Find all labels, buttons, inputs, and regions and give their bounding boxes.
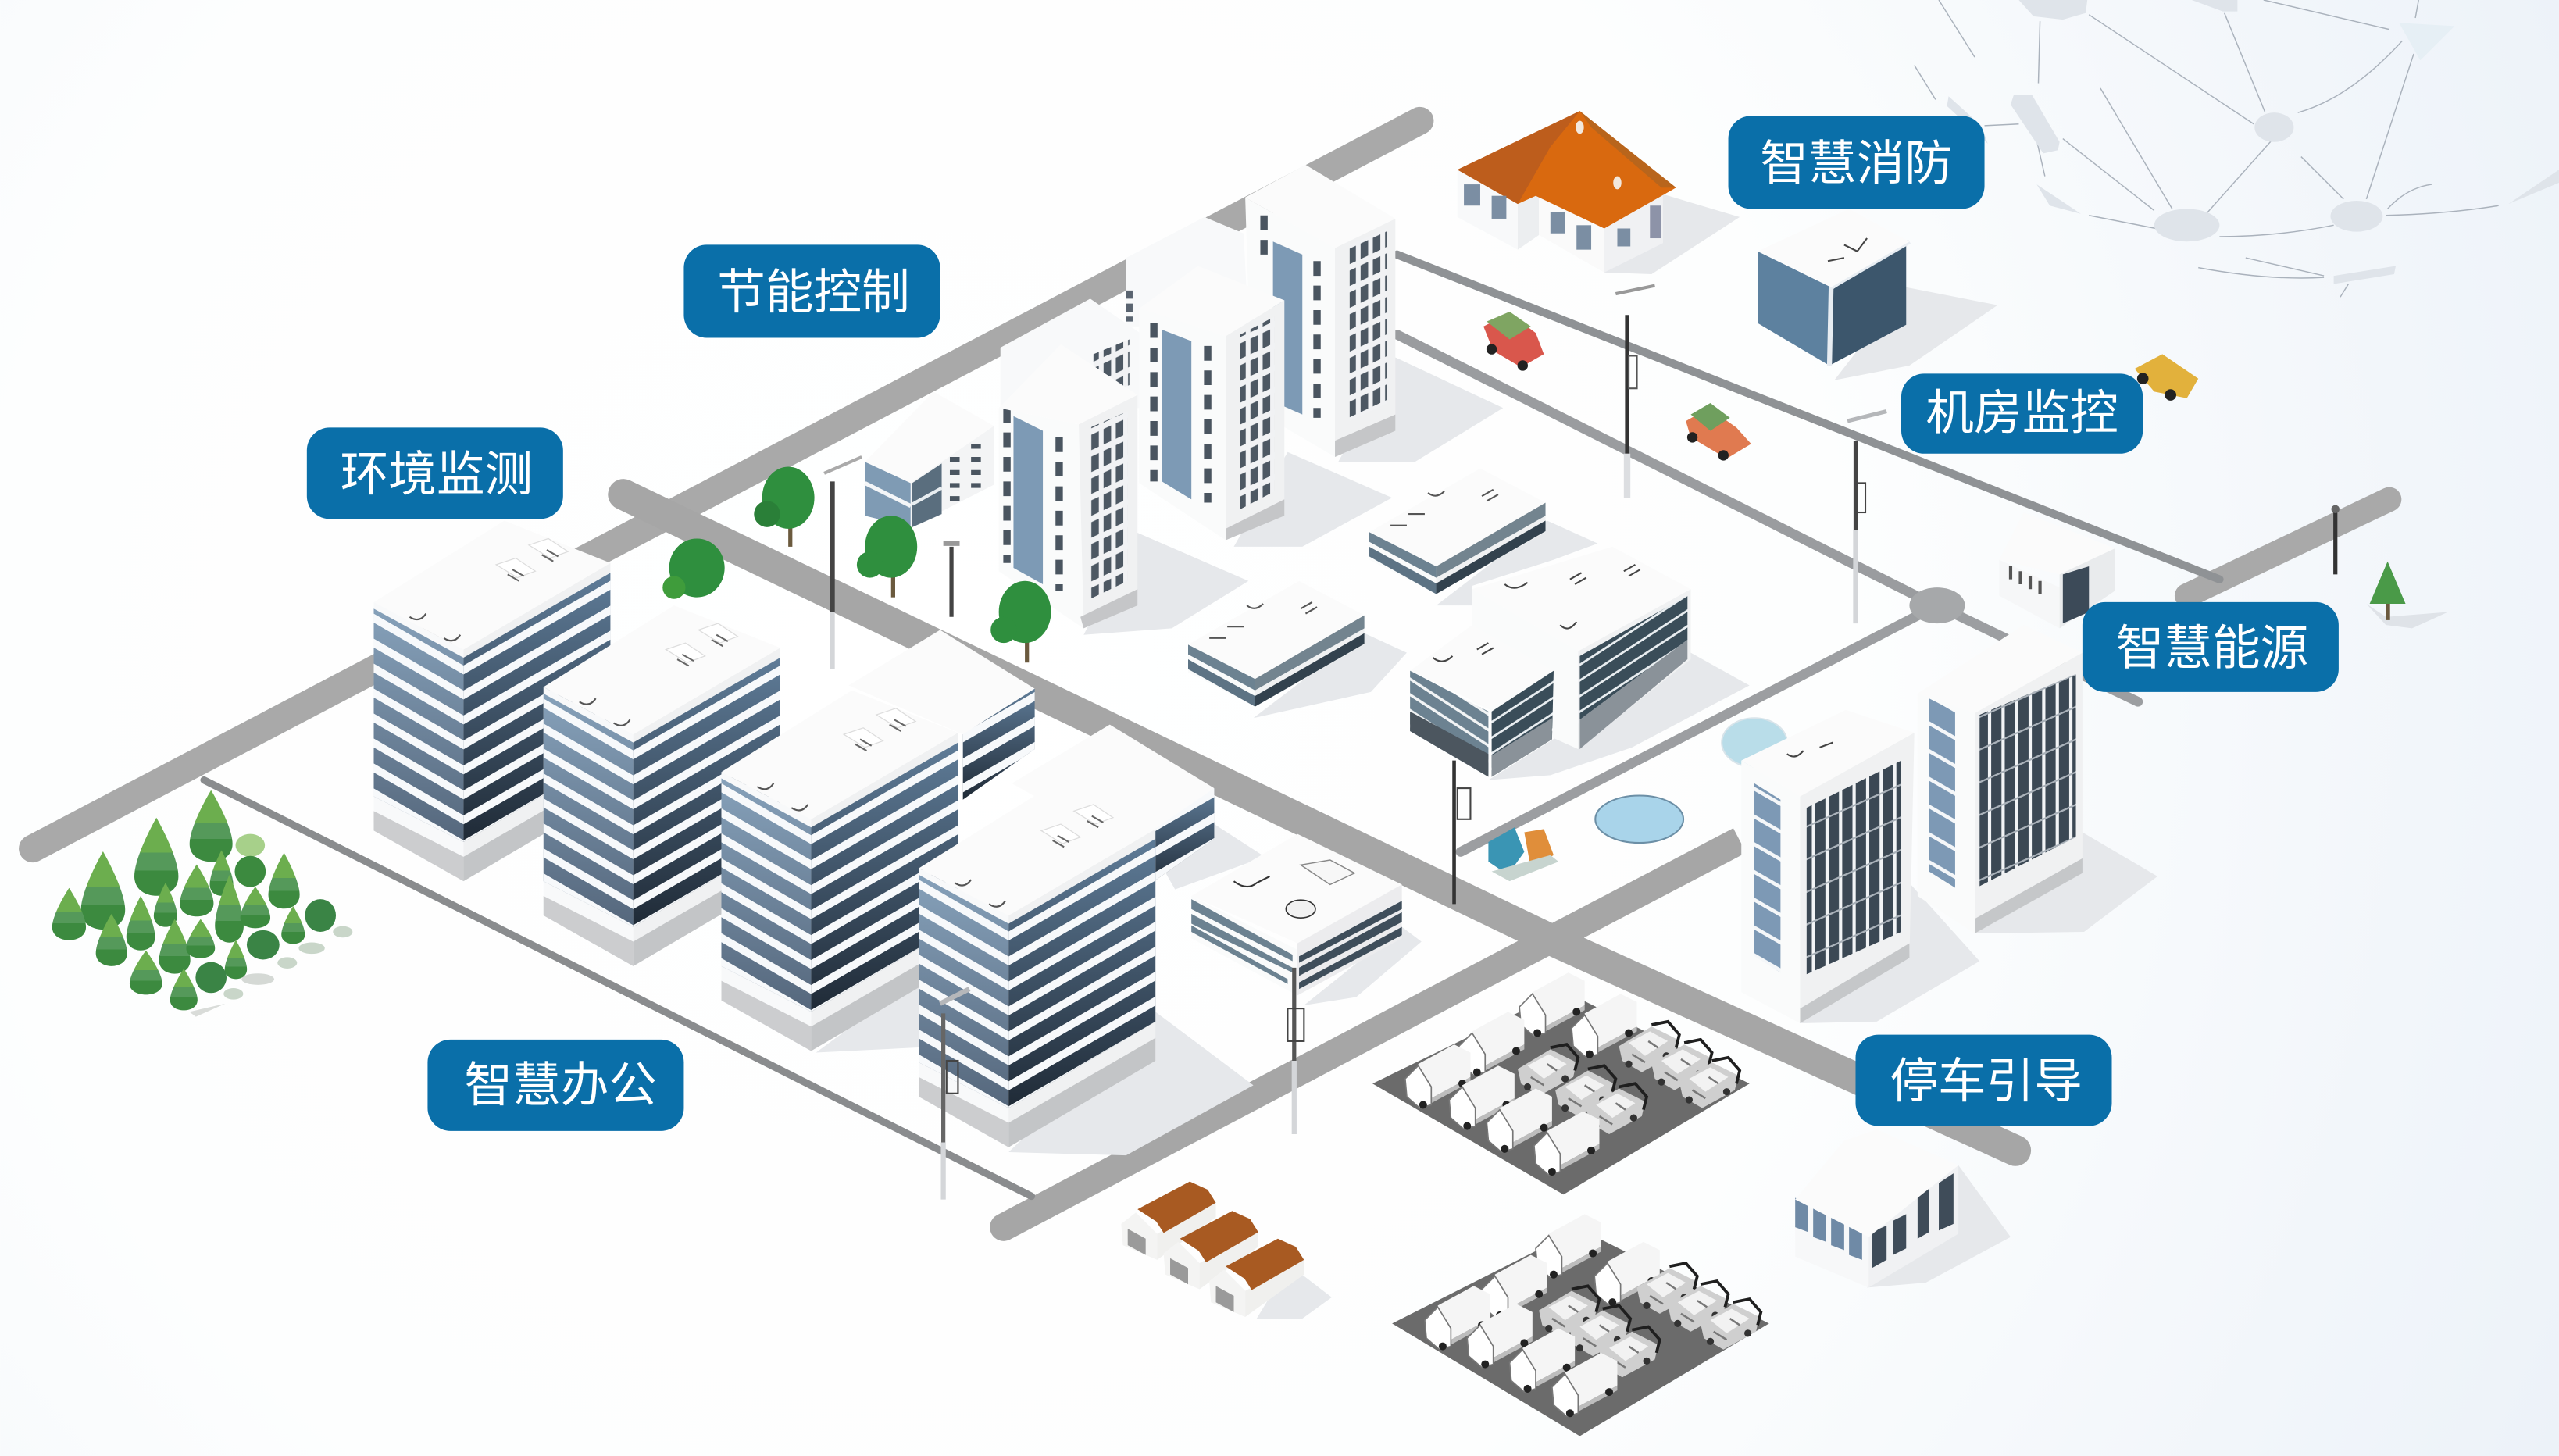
office tower B	[544, 605, 780, 966]
barns	[1121, 1182, 1304, 1317]
low building M4	[1191, 834, 1402, 995]
road: thin middle	[1397, 334, 1925, 601]
building: side office	[865, 391, 994, 527]
pond	[1595, 795, 1683, 843]
road: main diagonal	[33, 121, 1420, 848]
road junction	[1909, 587, 1965, 623]
office tower A	[373, 520, 610, 881]
road: thin connector	[1461, 605, 2138, 852]
label: 智慧消防: 智慧消防	[1760, 137, 1953, 191]
low building M2	[1188, 581, 1365, 707]
rooftop pool	[1722, 718, 1787, 767]
road: thin upper	[1397, 255, 2219, 580]
lamp post	[940, 989, 969, 1200]
building: back striped block right	[1012, 725, 1214, 890]
tower R2	[1918, 625, 2083, 933]
small office	[1795, 1129, 1958, 1287]
road: lower diagonal	[1004, 983, 1469, 1227]
label: 智慧能源: 智慧能源	[2116, 621, 2308, 675]
building: tower 2	[1139, 266, 1284, 541]
roads	[33, 121, 2389, 1227]
truck red	[1483, 312, 1544, 371]
building: behind tower 3	[1001, 298, 1143, 408]
vehicle yellow	[2135, 354, 2198, 401]
label: 停车引导	[1855, 1035, 2112, 1126]
office tower C	[721, 691, 958, 1051]
label: 智慧办公	[427, 1040, 683, 1131]
tree	[990, 581, 1051, 662]
label: 节能控制: 节能控制	[717, 266, 910, 319]
truck orange	[1686, 403, 1751, 461]
tree	[857, 516, 917, 598]
parking lot 1	[1372, 972, 1750, 1194]
label: 节能控制	[683, 244, 940, 337]
lamp post right	[2332, 505, 2340, 574]
tree group	[662, 467, 1051, 662]
lamp post	[1615, 286, 1655, 498]
label: 停车引导: 停车引导	[1890, 1055, 2083, 1108]
small tree right	[2366, 562, 2448, 628]
network graphic	[1915, 0, 2559, 297]
road: upper right	[2187, 499, 2389, 596]
building: tower 1	[1245, 165, 1395, 457]
shadows	[816, 194, 2157, 1319]
parking lot 2	[1392, 1214, 1769, 1436]
house with orange roof	[1458, 111, 1676, 273]
road: lower diagonal east part	[1469, 840, 1740, 983]
forest	[52, 790, 352, 1017]
network links	[1915, 0, 2499, 297]
office tower D	[919, 787, 1155, 1147]
label: 智慧办公: 智慧办公	[464, 1058, 657, 1112]
lamp post	[944, 544, 960, 617]
lamp post	[1287, 968, 1304, 1134]
lamp post	[1847, 411, 1886, 623]
lamp posts	[824, 286, 2340, 1200]
road: cross diagonal	[623, 494, 2015, 1151]
building: tower 3	[999, 344, 1137, 628]
label: 环境监测	[307, 427, 563, 519]
label: 智慧消防	[1729, 116, 1985, 209]
label: 机房监控	[1901, 373, 2143, 454]
vehicle teal	[1488, 827, 1558, 881]
lamp post	[1454, 761, 1470, 904]
network nodes	[1947, 0, 2559, 284]
tree	[662, 538, 725, 599]
building: upper back block	[1126, 217, 1248, 327]
tower R1	[1741, 710, 1915, 1023]
label: 机房监控: 机房监控	[1925, 386, 2118, 440]
data room cube	[1758, 209, 1909, 366]
complex M3	[1410, 547, 1690, 776]
low building M1	[1369, 469, 1546, 594]
tree	[754, 467, 815, 547]
lamp post	[824, 457, 862, 669]
label: 环境监测: 环境监测	[341, 448, 533, 501]
label: 智慧能源	[2083, 602, 2339, 692]
road: thin lower left	[204, 780, 1031, 1196]
small service building	[1999, 512, 2115, 628]
building: back striped block left	[848, 630, 1035, 800]
